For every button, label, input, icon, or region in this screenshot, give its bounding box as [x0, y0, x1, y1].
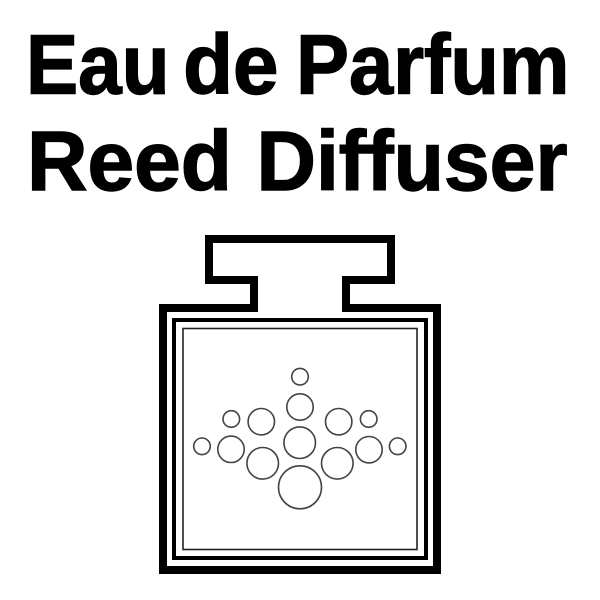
bottle inner frame: [183, 328, 417, 550]
title: Eau de Parfum: [26, 18, 570, 112]
bottle middle frame: [174, 320, 426, 558]
title: Reed Diffuser: Reed: [27, 114, 232, 208]
title: Reed Diffuser: [27, 114, 568, 208]
title: Eau de Parfum: Eau: [26, 18, 170, 112]
title: Reed Diffuser: Diffuser: [256, 114, 568, 208]
circle cluster: [194, 368, 406, 509]
bottle outer outline: [163, 239, 437, 570]
icon: perfume bottle: [163, 239, 437, 570]
title: Eau de Parfum: Parfum: [296, 18, 570, 112]
title: Eau de Parfum: de: [183, 18, 278, 112]
